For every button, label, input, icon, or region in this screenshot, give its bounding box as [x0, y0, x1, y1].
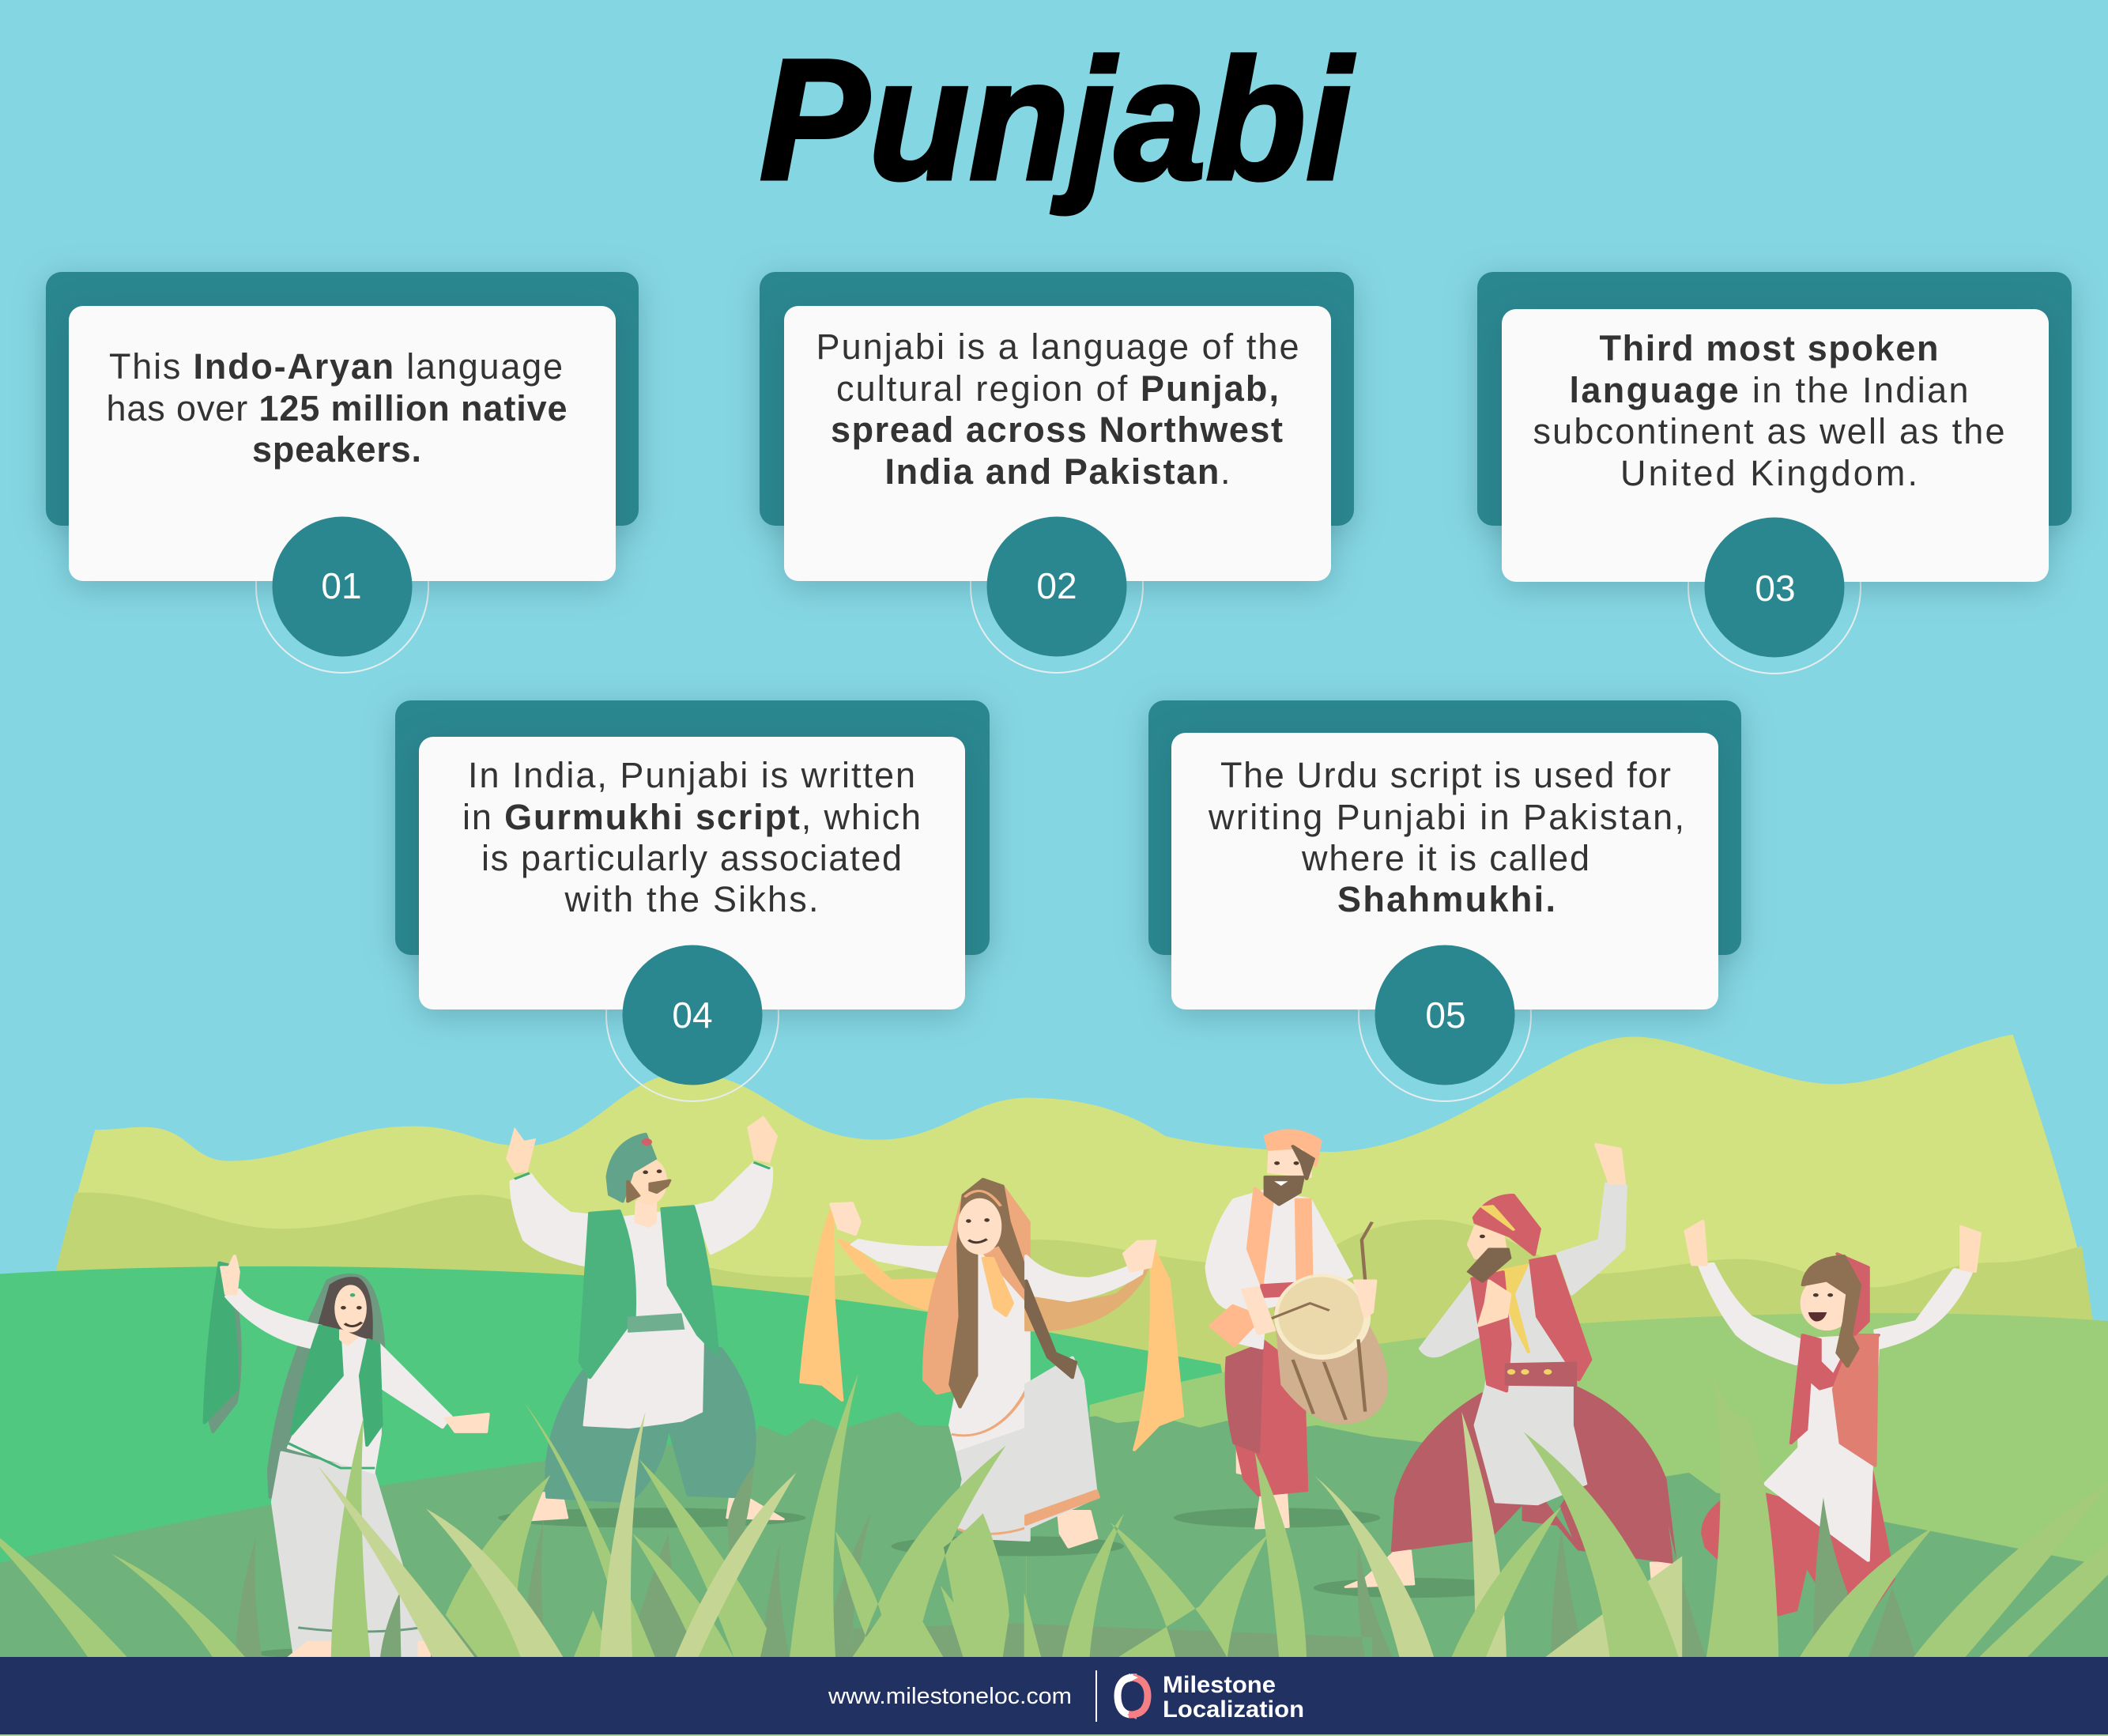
panel: card 03: [1477, 272, 2072, 674]
card 03 text: language in the Indian: [1570, 370, 1968, 410]
card 02 text: [816, 326, 1299, 492]
card 05 text: Shahmukhi.: [1337, 879, 1556, 919]
footer bar: [0, 1657, 2108, 1736]
landscape hills: [0, 1035, 2108, 1705]
card 03 text: [1533, 328, 2004, 493]
panel: card 01: [46, 272, 639, 673]
figure: man in red turban: [1346, 1144, 1679, 1588]
card 02 text: spread across Northwest: [831, 409, 1283, 450]
card 02 text: cultural region of Punjab,: [836, 368, 1279, 409]
badge 05: [1375, 945, 1514, 1085]
figure: woman with raised arms: [1686, 1221, 1980, 1615]
website url: www.milestoneloc.com: [828, 1684, 1072, 1709]
badge 03: 03: [1755, 568, 1796, 609]
card 04 text: In India, Punjabi is written: [468, 755, 915, 795]
logo wordmark: Localization: [1163, 1696, 1304, 1723]
card 01 text: [106, 346, 568, 470]
card 04 text: is particularly associated: [481, 838, 902, 878]
badge 01: [272, 517, 413, 656]
card 05 text: [1208, 755, 1684, 919]
card 05 text: writing Punjabi in Pakistan,: [1208, 797, 1684, 837]
badge 05: 05: [1425, 994, 1466, 1036]
card 03 text: Third most spoken: [1600, 328, 1938, 368]
figure: woman with green scarf: [205, 1256, 488, 1658]
card 04 text: [462, 755, 921, 919]
logo wordmark: Milestone: [1163, 1672, 1276, 1698]
title: Punjabi: [760, 24, 1355, 215]
badge 04: [623, 945, 762, 1085]
panel: card 04: [395, 700, 990, 1101]
badge 03: [1704, 517, 1845, 658]
panel: card 05: [1148, 700, 1741, 1101]
card 03 text: United Kingdom.: [1620, 453, 1918, 493]
card 04 text: in Gurmukhi script, which: [462, 797, 921, 837]
foreground grass: [0, 1373, 2108, 1658]
card 01 text: has over 125 million native: [106, 388, 568, 428]
figure: woman with orange scarf: [801, 1179, 1182, 1547]
card 01 text: speakers.: [252, 429, 421, 470]
panel: card 02: [760, 272, 1354, 673]
ground shadows: [255, 1508, 1514, 1659]
logo wordmark: [1163, 1672, 1304, 1723]
badge 04: 04: [672, 994, 713, 1036]
badge 02: 02: [1036, 565, 1077, 606]
card 03 text: subcontinent as well as the: [1533, 411, 2004, 451]
card 05 text: The Urdu script is used for: [1220, 755, 1671, 795]
icon: milestone logo ring: [1118, 1674, 1148, 1719]
badge 02: [986, 517, 1127, 656]
card 04 text: with the Sikhs.: [564, 879, 819, 919]
card 05 text: where it is called: [1301, 838, 1589, 878]
card 01 text: This Indo-Aryan language: [109, 346, 563, 387]
card 02 text: India and Pakistan.: [885, 451, 1230, 492]
figure: man in green turban: [506, 1115, 783, 1520]
badge 01: 01: [321, 565, 362, 606]
card 02 text: Punjabi is a language of the: [816, 326, 1299, 367]
figure: drummer: [1207, 1130, 1386, 1528]
